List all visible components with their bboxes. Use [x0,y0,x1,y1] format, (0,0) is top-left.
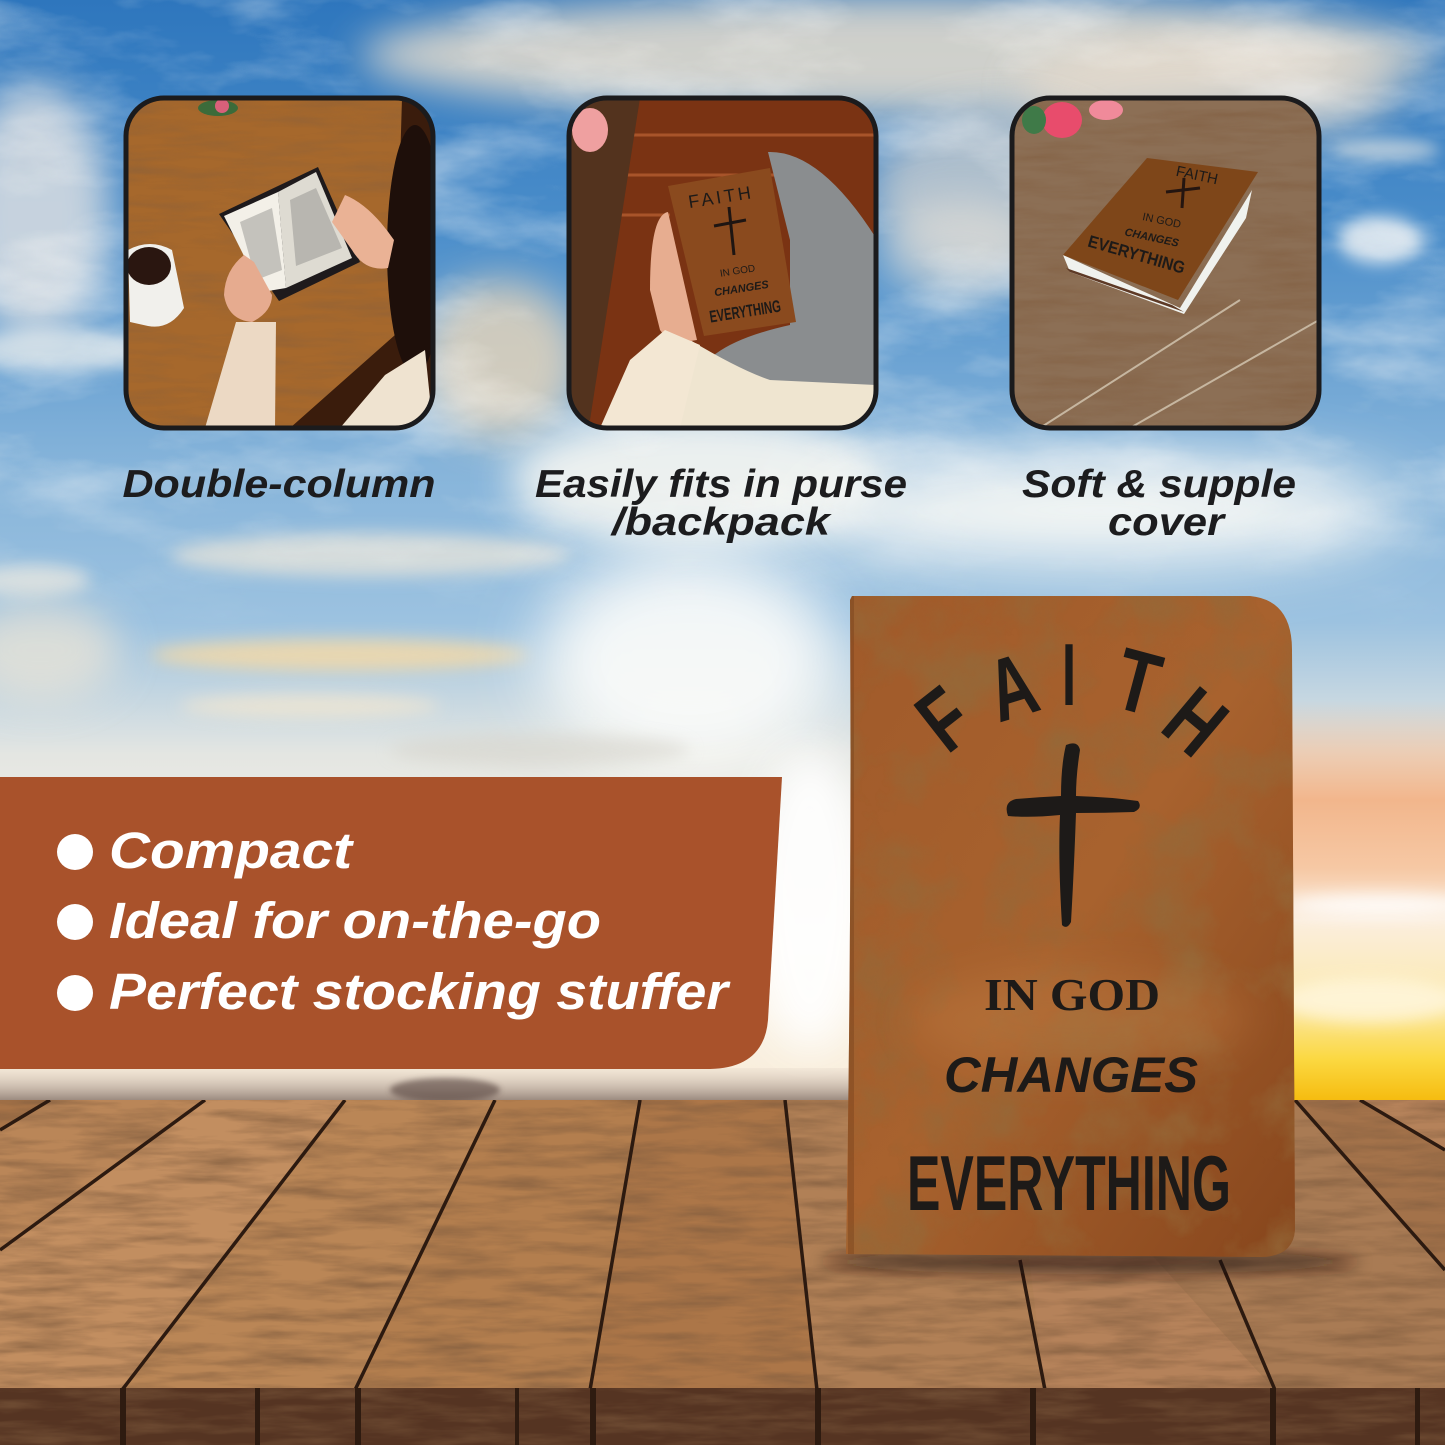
book text: EVERYTHING: EVERYTHING [907,1139,1231,1227]
photo: pocket book held on lap: CHANGES [713,279,770,299]
book title: FAITH: F [898,668,990,770]
bullet: perfect stocking stuffer: Perfect stocking stuffer [109,963,731,1020]
background: sunset sky with clouds [0,0,1445,1110]
panel: feature bullet list [0,777,782,1069]
book text: IN GOD: IN GOD [984,969,1160,1020]
photo: open bible held over table [126,98,443,428]
photo: pocket book held on lap: FAITH [687,182,755,212]
icon: cross [1007,743,1140,927]
photo: book lying on wooden table: CHANGES [1123,226,1180,250]
book shadow on table [820,1250,1360,1274]
leather book: Faith in God Changes Everything [840,590,1300,1260]
photo: book lying on wooden table: FAITH [1174,163,1219,188]
photo: book lying on wooden table: EVERYTHING [1086,232,1187,278]
caption: easily fits in purse / backpack: Easily fits in purse [535,463,907,506]
caption: soft and supple cover [1022,463,1296,544]
photo: book lying on wooden table: IN GOD [1141,211,1182,231]
caption: soft and supple cover: Soft & supple [1022,463,1296,506]
wooden table [0,1100,1445,1445]
photo: book lying on wooden table [1012,98,1319,428]
book title: FAITH: A [976,633,1049,741]
caption: double-column: Double-column [122,463,436,506]
book title: FAITH: T [1105,628,1171,735]
photo: pocket book held on lap [569,98,876,428]
photo: pocket book held on lap: IN GOD [719,263,756,280]
caption: soft and supple cover: cover [1108,501,1226,544]
book title: FAITH: H [1145,668,1246,775]
book title: FAITH [898,625,1246,775]
caption: easily fits in purse / backpack: /backpack [610,501,833,544]
caption: easily fits in purse / backpack [535,463,907,544]
bullet: ideal for on-the-go: Ideal for on-the-go [109,892,601,949]
bullet: compact: Compact [109,822,354,879]
photo: pocket book held on lap: EVERYTHING [708,297,782,327]
book text: CHANGES: CHANGES [944,1047,1198,1103]
book title: FAITH: I [1062,625,1076,724]
